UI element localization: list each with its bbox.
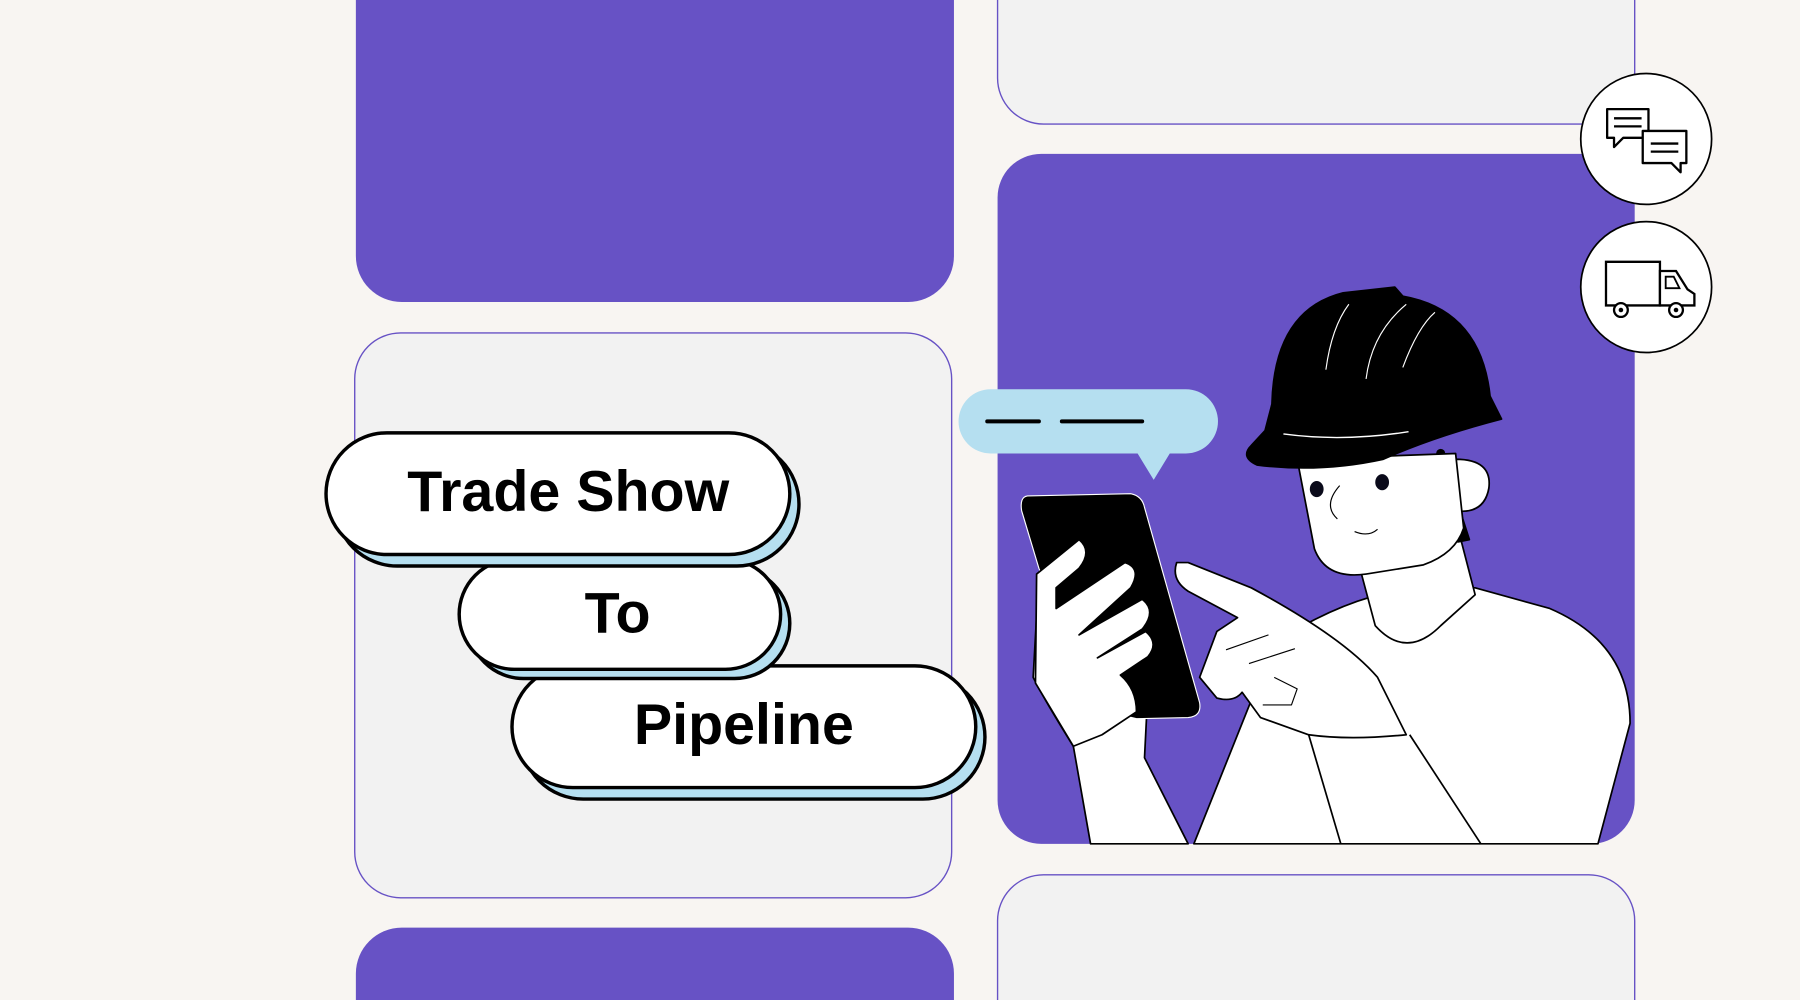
panel: top-left purple block <box>356 0 954 302</box>
title pill: Trade Show: Trade Show <box>407 460 730 524</box>
title pill: To <box>459 559 790 679</box>
panel: left gray card <box>355 333 952 898</box>
panel: top-right gray card <box>998 0 1635 124</box>
illustration: worker <box>1021 287 1630 844</box>
title pill: Trade Show <box>326 433 799 566</box>
title pill: Pipeline: Pipeline <box>634 693 854 757</box>
title pill: To: To <box>585 582 651 646</box>
icon: chat bubbles <box>1581 74 1712 204</box>
icon: delivery truck <box>1581 222 1712 352</box>
panel: bottom-right gray card <box>998 875 1635 1000</box>
title pill: Pipeline <box>512 666 985 799</box>
callout: speech bubble <box>959 389 1218 480</box>
panel: right purple card with worker <box>998 154 1635 844</box>
panel: bottom-left purple block <box>356 928 954 1000</box>
